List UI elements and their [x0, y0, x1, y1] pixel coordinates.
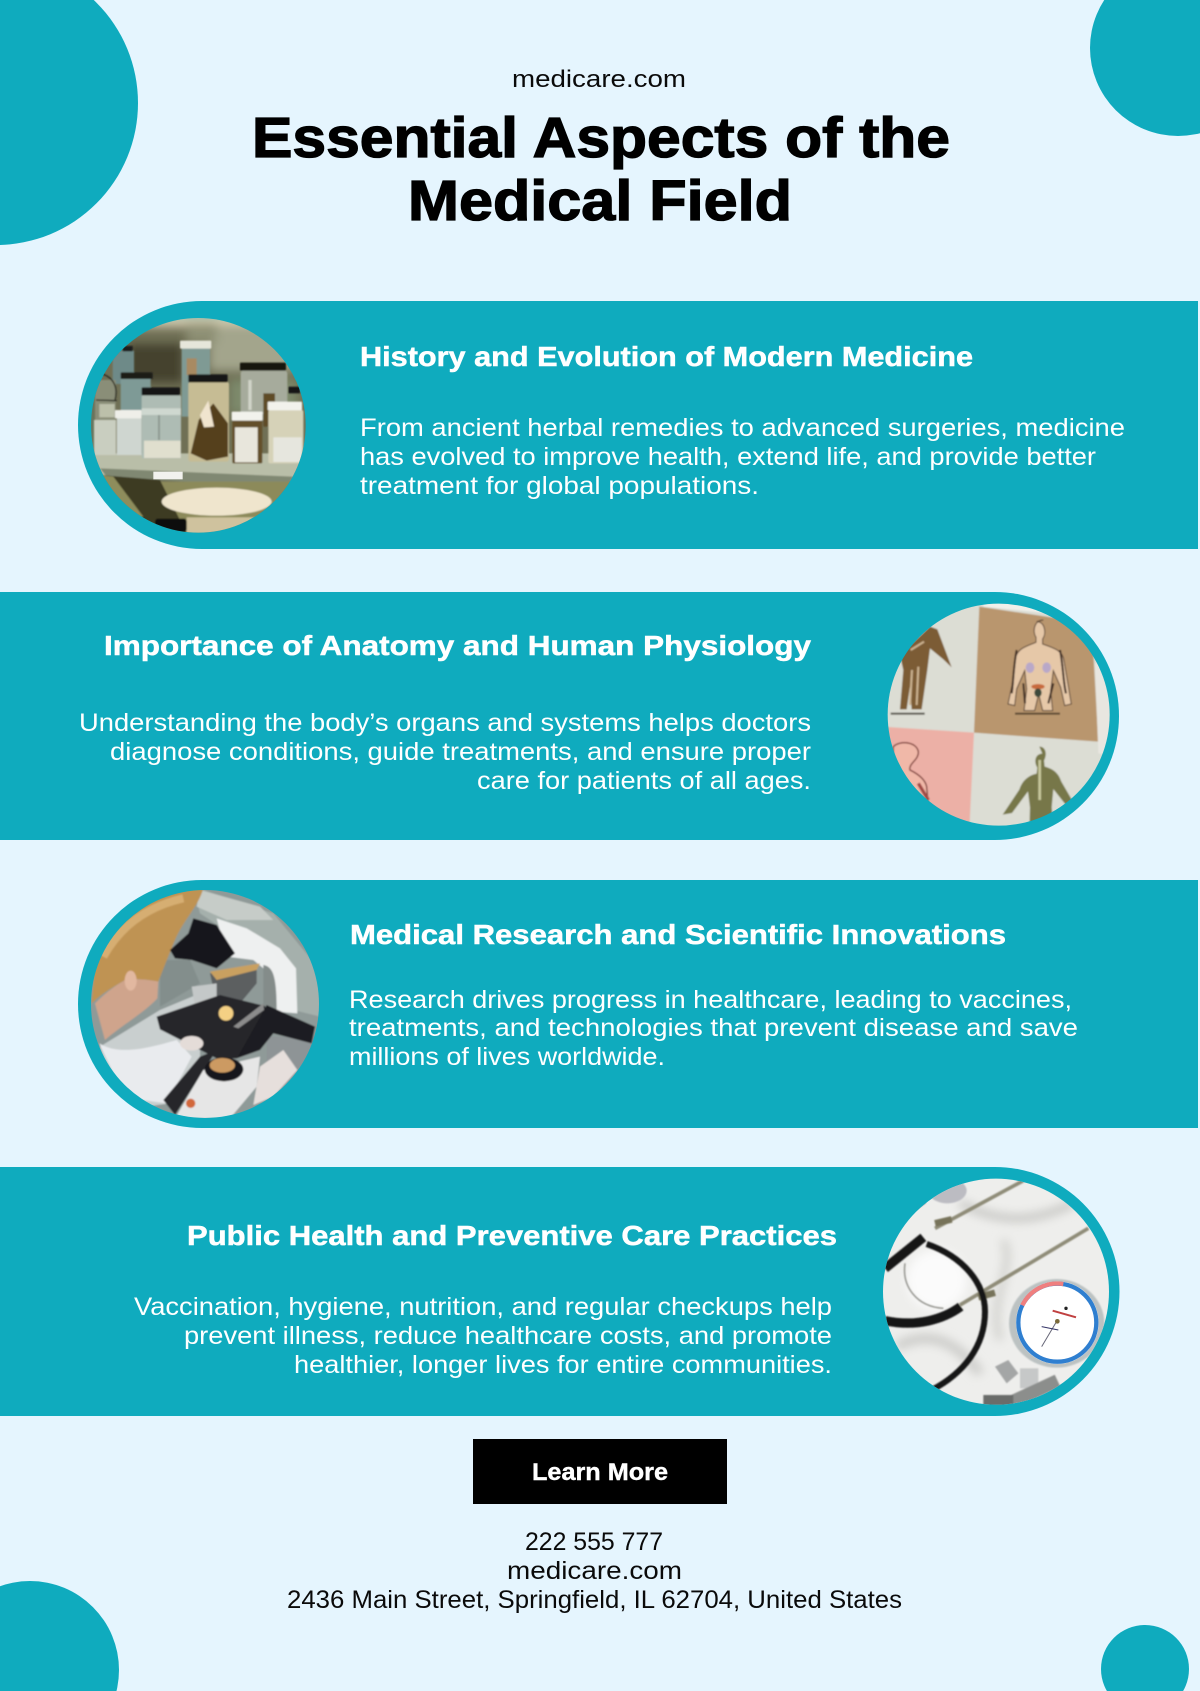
eyepieces: [170, 918, 235, 968]
body text: [360, 414, 1125, 500]
body text: Research drives progress in healthcare, leading to vaccines,: [349, 986, 1072, 1014]
shelf: [95, 452, 299, 480]
muscle figure: [900, 627, 952, 709]
body text: millions of lives worldwide.: [349, 1043, 665, 1071]
neck and face: [95, 979, 158, 1040]
lab coat: [99, 1040, 192, 1103]
green figure: [1002, 746, 1072, 822]
decorative circle top right: [1090, 0, 1200, 136]
body text: treatments, and technologies that prevent disease and save: [349, 1014, 1078, 1042]
panel: public health: [0, 1167, 1120, 1416]
objectives: [210, 970, 258, 1002]
photo: anatomy charts: [888, 604, 1110, 826]
body text: has evolved to improve health, extend life, and provide better: [360, 443, 1096, 471]
body text: [134, 1293, 832, 1379]
photo: specimen jars on shelf: [91, 318, 306, 533]
panel: history and evolution: [78, 301, 1198, 549]
heading: Medical Research and Scientific Innovations: [350, 919, 1006, 950]
heading: History and Evolution of Modern Medicine: [360, 341, 973, 372]
shelf label: [153, 472, 183, 479]
photo: researcher at microscope: [91, 890, 319, 1118]
gauge fitting: [995, 1360, 1018, 1383]
button: learn more: [473, 1439, 727, 1504]
decorative circle top left: [0, 0, 138, 245]
heading: Importance of Anatomy and Human Physiology: [104, 630, 811, 661]
body text: [79, 709, 811, 795]
contact details: [287, 1528, 902, 1614]
body text: care for patients of all ages.: [477, 767, 811, 795]
decorative circle bottom left: [0, 1581, 119, 1691]
title: Essential Aspects of the: [252, 106, 950, 170]
microscope arm: [217, 918, 297, 1013]
stage: [157, 995, 267, 1058]
body text: treatment for global populations.: [360, 472, 759, 500]
panel: anatomy and physiology: [0, 592, 1120, 840]
body text: Understanding the body’s organs and systems helps doctors: [79, 709, 811, 737]
body text: diagnose conditions, guide treatments, and ensure proper: [110, 738, 811, 766]
body text: From ancient herbal remedies to advanced surgeries, medicine: [360, 414, 1125, 442]
body text: prevent illness, reduce healthcare costs, and promote: [184, 1322, 832, 1350]
jars: [182, 347, 210, 417]
contact details: 222 555 777: [525, 1528, 663, 1556]
decorative circle bottom right: [1101, 1625, 1189, 1691]
pink silhouette: [892, 741, 930, 801]
tan figure: [1008, 620, 1071, 711]
contact details: medicare.com: [507, 1557, 682, 1585]
body text: healthier, longer lives for entire communities.: [294, 1351, 832, 1379]
contact details: 2436 Main Street, Springfield, IL 62704, United States: [287, 1586, 902, 1614]
glove: [253, 1050, 297, 1105]
photo: stethoscope and gauge: [883, 1178, 1109, 1405]
body text: [349, 986, 1078, 1071]
panel: medical research: [78, 880, 1198, 1128]
title: Medical Field: [408, 169, 792, 233]
title: [252, 106, 950, 233]
strip and base: [163, 1050, 217, 1115]
body text: Vaccination, hygiene, nutrition, and regular checkups help: [134, 1293, 832, 1321]
gauge body: [1009, 1279, 1104, 1368]
heading: Public Health and Preventive Care Practices: [187, 1220, 837, 1251]
hair: [92, 888, 203, 1003]
button: learn more: Learn More: [532, 1459, 668, 1486]
site name: medicare.com: [512, 66, 686, 93]
